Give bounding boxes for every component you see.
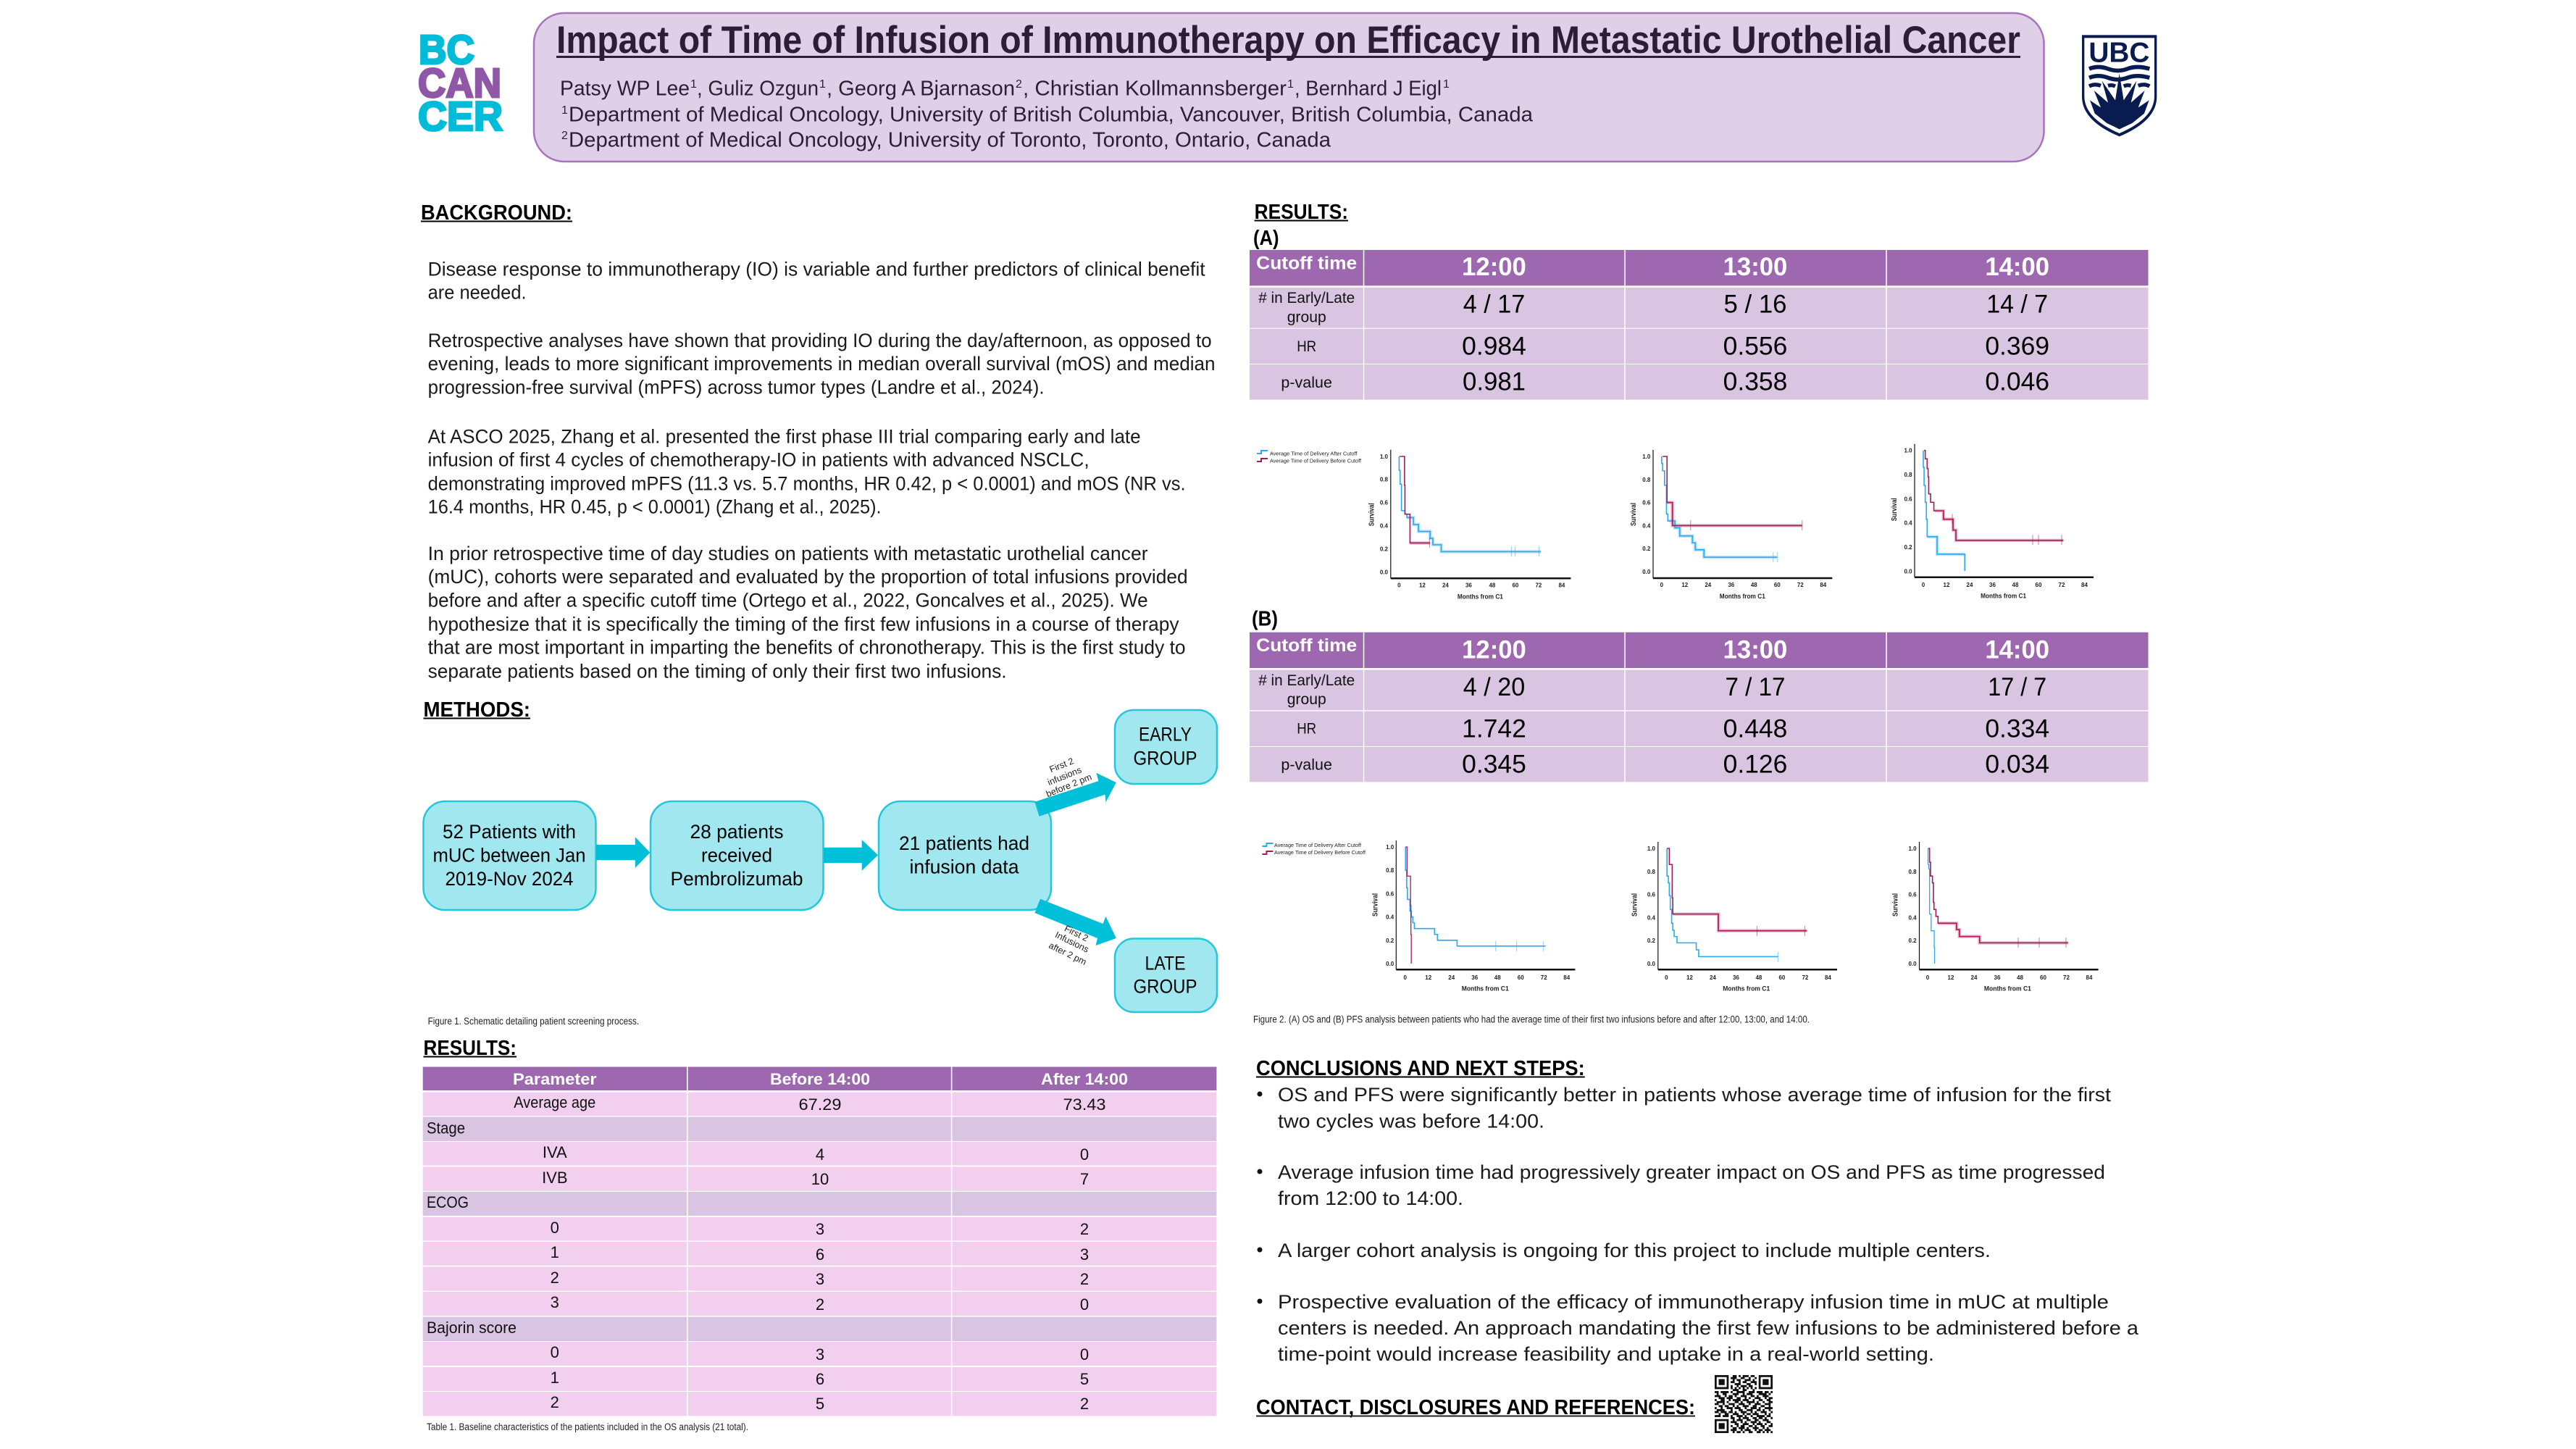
chart: OS cutoff 14:00: Months from C1 [1981,593,2026,600]
table B: progression-free survival cutoffs: 14:00 [1985,635,2049,664]
box: 28 patients [651,801,823,910]
chart: PFS cutoff 13:00: 0.8 [1647,869,1656,875]
background text block: separate patients based on the timing of only their first two infusions. [428,661,1007,682]
chart: OS cutoff 12:00: 24 [1442,582,1449,588]
background text block: evening, leads to more significant improvements in median overall survival (mOS) and median [428,353,1216,375]
table 1: baseline characteristics: 3 [816,1220,824,1238]
table B: progression-free survival cutoffs: group [1287,691,1326,708]
chart: PFS cutoff 12:00: 72 [1541,974,1547,981]
chart: PFS cutoff 13:00: Survival [1631,893,1639,916]
chart: OS cutoff 14:00: 1.0 [1904,448,1912,454]
chart: PFS cutoff 13:00: 0.2 [1647,938,1656,944]
chart: PFS cutoff 14:00: 48 [2017,974,2023,981]
table 1: baseline characteristics: 0 [551,1219,559,1237]
box: 28 patients: 28 patients [690,821,784,843]
heading: contact: CONTACT, DISCLOSURES AND REFERENCES: [1256,1396,1695,1419]
background text block: that are most important in imparting the benefits of chronotherapy. This is the first study to [428,637,1186,659]
bullet 4: time-point would increase feasibility and uptake in a real-world setting. [1278,1343,1934,1365]
chart: OS cutoff 13:00: Survival [1630,503,1638,526]
table A: overall survival cutoffs [1250,250,2149,400]
chart: OS cutoff 13:00: 60 [1774,582,1781,588]
chart: OS cutoff 14:00: 72 [2059,582,2065,588]
caption: table 1: Table 1. Baseline characteristics of the patients included in the OS analysis (21 total). [427,1421,748,1432]
chart: OS cutoff 14:00 [1891,444,2094,600]
affiliation 1: 1 [561,104,568,117]
background text block: Retrospective analyses have shown that providing IO during the day/afternoon, as opposed to [428,330,1212,351]
chart: PFS cutoff 12:00: 0.8 [1386,867,1394,874]
chart: OS cutoff 13:00: 0.4 [1642,522,1651,529]
chart: PFS cutoff 13:00: 1.0 [1647,845,1656,852]
chart: OS cutoff 12:00: 12 [1419,582,1426,588]
chart: PFS cutoff 12:00: 1.0 [1386,844,1394,851]
chart: PFS cutoff 13:00: 12 [1686,974,1693,981]
chart: PFS cutoff 13:00: 72 [1802,974,1809,981]
background text block [428,259,1216,682]
table B: progression-free survival cutoffs: 0.345 [1462,751,1526,779]
chart: PFS cutoff 13:00: 60 [1778,974,1786,981]
table A: overall survival cutoffs: 14 / 7 [1986,291,2048,319]
table 1: baseline characteristics: ECOG [427,1193,469,1211]
logo: UBC shield: UBC [2088,37,2149,69]
chart: OS cutoff 12:00: 0.6 [1380,500,1389,506]
table B: progression-free survival cutoffs: 7 / 17 [1726,673,1785,701]
table 1: baseline characteristics: 3 [816,1345,824,1364]
table 1: baseline characteristics: 7 [1080,1170,1089,1188]
table A: overall survival cutoffs: 5 / 16 [1724,291,1786,319]
table 1: baseline characteristics: 1 [551,1369,559,1387]
bullet 1: two cycles was before 14:00. [1278,1110,1544,1132]
chart: PFS cutoff 14:00: 60 [2040,974,2046,981]
box: 52 patients [423,801,595,910]
arrow label: after 2 pm: after 2 pm [1047,940,1088,967]
authors: 1 [1287,78,1294,91]
table B: progression-free survival cutoffs: 0.126 [1723,751,1787,779]
table 1: baseline characteristics: Parameter [513,1070,597,1088]
arrow label: before 2 pm [1045,756,1093,799]
table A: overall survival cutoffs: 13:00 [1723,253,1787,281]
table 1: baseline characteristics: 1 [551,1243,559,1261]
arrow: box 1 to box 2 [596,837,650,868]
bullet 1: OS and PFS were significantly better in patients whose average time of infusion for the first [1278,1084,2112,1106]
heading: conclusions: CONCLUSIONS AND NEXT STEPS: [1256,1057,1585,1080]
arrow: to early group [1034,773,1116,817]
table B: progression-free survival cutoffs: HR [1297,720,1316,737]
chart: OS cutoff 12:00: 0.0 [1380,569,1389,575]
box: late group: LATE [1145,953,1185,974]
arrow label: after 2 pm: Infusions [1053,930,1090,955]
legend: chart row B: Average Time of Delivery After Cutoff [1274,842,1362,848]
heading: background: BACKGROUND: [421,201,572,225]
background text block: In prior retrospective time of day studies on patients with metastatic urothelial cancer [428,543,1148,564]
chart: PFS cutoff 12:00: Months from C1 [1462,985,1509,992]
chart: OS cutoff 12:00: Months from C1 [1458,593,1503,600]
chart: PFS cutoff 14:00: 24 [1971,974,1978,981]
bullet 4 [1258,1291,2138,1365]
logo: BC Cancer: BC [419,27,474,73]
arrow label: after 2 pm [1047,923,1090,967]
table B: progression-free survival cutoffs: 4 / 20 [1463,673,1525,701]
box: 52 patients: 52 Patients with [443,821,576,843]
table B: progression-free survival cutoffs: p-value [1281,757,1332,774]
box: late group: GROUP [1133,976,1197,998]
table A: overall survival cutoffs: 12:00 [1462,253,1526,281]
background text block: infusion of first 4 cycles of chemotherapy-IO in patients with advanced NSCLC, [428,448,1090,470]
chart: OS cutoff 14:00: 36 [1989,582,1996,588]
chart: PFS cutoff 12:00: 12 [1425,974,1432,981]
table 1: baseline characteristics: 67.29 [798,1095,842,1114]
box: early group: GROUP [1133,748,1197,769]
table 1: baseline characteristics: 2 [1080,1220,1089,1238]
title: Impact of Time of Infusion of Immunotherapy on Efficacy in Metastatic Urothelial Cancer [556,19,2020,62]
chart: OS cutoff 14:00: Survival [1891,498,1899,521]
chart: OS cutoff 14:00: 48 [2012,582,2019,588]
authors: , Georg A Bjarnason [827,78,1015,101]
chart: OS cutoff 12:00: 36 [1465,582,1472,588]
legend: chart row B [1262,842,1366,856]
chart: PFS cutoff 14:00: 0.2 [1908,938,1917,944]
authors: 2 [1016,78,1022,91]
box: 28 patients: received [701,845,772,867]
table A: overall survival cutoffs: 0.369 [1985,332,2049,360]
table A: overall survival cutoffs: 0.984 [1462,332,1526,360]
legend: chart row A: Average Time of Delivery After Cutoff [1270,451,1358,456]
chart: PFS cutoff 13:00: 0.6 [1647,892,1656,898]
chart: PFS cutoff 14:00: Survival [1892,893,1900,916]
box: early group [1115,710,1217,784]
chart: OS cutoff 13:00: 0.8 [1642,477,1651,483]
chart: PFS cutoff 12:00: 0.6 [1386,890,1394,897]
chart: OS cutoff 13:00: 36 [1728,582,1735,588]
chart: OS cutoff 13:00 [1630,450,1832,600]
chart: OS cutoff 14:00: 60 [2036,582,2042,588]
chart: OS cutoff 14:00: 0.8 [1904,472,1912,478]
chart: OS cutoff 13:00: 0.2 [1642,546,1651,552]
chart: OS cutoff 12:00 [1368,450,1571,600]
bullet 2: Average infusion time had progressively greater impact on OS and PFS as time progressed [1278,1161,2105,1183]
authors: 1 [1443,78,1450,91]
chart: OS cutoff 13:00: 72 [1797,582,1804,588]
table 1: baseline characteristics: After 14:00 [1041,1070,1128,1088]
chart: PFS cutoff 12:00: 36 [1471,974,1479,981]
chart: OS cutoff 12:00: 60 [1512,582,1519,588]
table B: progression-free survival cutoffs: # in Early/Late [1258,672,1355,689]
legend: chart row B: Average Time of Delivery Before Cutoff [1274,849,1366,856]
chart: PFS cutoff 12:00 [1372,840,1575,992]
logo: BC Cancer [418,27,503,140]
chart: PFS cutoff 13:00: Months from C1 [1723,985,1770,992]
label: A: (A) [1253,227,1279,250]
bullet 2 [1258,1161,2105,1209]
chart: OS cutoff 14:00: 0 [1922,582,1925,588]
affiliation 2: 2 [561,130,568,142]
chart: OS cutoff 14:00: 0.0 [1904,568,1912,575]
logo: BC Cancer: CER [418,93,503,140]
table 1: baseline characteristics: 2 [551,1269,559,1287]
heading: methods: METHODS: [423,698,530,722]
table 1: baseline characteristics: 4 [816,1145,824,1164]
chart: PFS cutoff 13:00: 84 [1825,974,1831,981]
chart: OS cutoff 14:00: 84 [2081,582,2088,588]
table 1: baseline characteristics [423,1066,1216,1416]
chart: PFS cutoff 13:00: 0.0 [1647,961,1656,967]
chart: OS cutoff 12:00: 0.8 [1380,477,1389,483]
chart: OS cutoff 12:00: 72 [1535,582,1542,588]
background text block: Disease response to immunotherapy (IO) is variable and further predictors of clinical benefit [428,259,1205,280]
chart: OS cutoff 13:00: 0.0 [1642,569,1651,575]
conclusions list [1258,1084,2138,1365]
table B: progression-free survival cutoffs: 1.742 [1462,714,1526,743]
authors: 1 [819,78,826,91]
chart: PFS cutoff 14:00: 0.4 [1908,914,1917,921]
table 1: baseline characteristics: 0 [1080,1295,1089,1314]
chart: OS cutoff 13:00: 12 [1681,582,1689,588]
bullet 4: centers is needed. An approach mandating the first few infusions to be administered before a [1278,1317,2138,1339]
chart: PFS cutoff 13:00: 48 [1755,974,1762,981]
chart: PFS cutoff 14:00: 84 [2086,974,2093,981]
background text block: are needed. [428,282,527,304]
background text block: (mUC), cohorts were separated and evaluated by the proportion of total infusions provided [428,566,1188,588]
chart: PFS cutoff 14:00: 0.8 [1908,869,1917,875]
QR code [1715,1375,1773,1433]
chart: PFS cutoff 14:00: 1.0 [1908,845,1917,852]
chart: PFS cutoff 12:00: 24 [1448,974,1455,981]
table 1: baseline characteristics: Bajorin score [427,1319,517,1337]
legend: chart row A: Average Time of Delivery Before Cutoff [1270,458,1362,464]
chart: OS cutoff 13:00: Months from C1 [1720,593,1765,600]
affiliation 2: Department of Medical Oncology, University of Toronto, Toronto, Ontario, Canada [569,129,1331,152]
arrow label: before 2 pm: First 2 [1048,756,1075,774]
table B: progression-free survival cutoffs: 0.034 [1985,751,2049,779]
chart: PFS cutoff 14:00: Months from C1 [1984,985,2031,992]
chart: PFS cutoff 14:00: 72 [2063,974,2070,981]
chart: PFS cutoff 13:00 [1631,842,1837,992]
chart: PFS cutoff 14:00: 0 [1926,974,1930,981]
caption: figure 1: Figure 1. Schematic detailing patient screening process. [428,1016,639,1027]
chart: OS cutoff 13:00: 24 [1705,582,1712,588]
chart: PFS cutoff 14:00: 0.0 [1908,961,1917,967]
bullet 4: Prospective evaluation of the efficacy of immunotherapy infusion time in mUC at multiple [1278,1291,2109,1313]
table 1: baseline characteristics: 5 [816,1395,824,1413]
box: 52 patients: mUC between Jan [433,845,585,867]
box: 52 patients: 2019-Nov 2024 [445,868,574,890]
chart: OS cutoff 14:00: 0.2 [1904,544,1912,551]
chart: OS cutoff 12:00: 0 [1397,582,1401,588]
table 1: baseline characteristics: 0 [1080,1345,1089,1364]
chart: OS cutoff 13:00: 48 [1751,582,1757,588]
flowchart [423,710,1217,1012]
chart: OS cutoff 13:00: 84 [1820,582,1827,588]
chart: PFS cutoff 14:00: 0.6 [1908,892,1917,898]
box: 21 patients: 21 patients had [899,832,1029,854]
chart: OS cutoff 12:00: 84 [1558,582,1565,588]
chart: OS cutoff 12:00: 0.4 [1380,522,1389,529]
table B: progression-free survival cutoffs: 13:00 [1723,635,1787,664]
box: late group [1115,939,1217,1012]
table A: overall survival cutoffs: 14:00 [1985,253,2049,281]
table 1: baseline characteristics: IVB [542,1169,568,1187]
chart: OS cutoff 14:00: 0.6 [1904,496,1912,502]
chart: PFS cutoff 12:00: 0 [1403,974,1407,981]
bullet 3: A larger cohort analysis is ongoing for this project to include multiple centers. [1278,1240,1991,1261]
chart: PFS cutoff 12:00: 0.0 [1386,961,1394,967]
bullet 1 [1258,1084,2112,1132]
authors: 1 [690,78,697,91]
arrow label: after 2 pm: First 2 [1063,923,1090,943]
arrow: to late group [1034,899,1116,945]
background text block: hypothesize that it is specifically the timing of the first few infusions in a course of therapy [428,613,1179,635]
table A: overall survival cutoffs: # in Early/Late [1258,290,1355,306]
chart: PFS cutoff 12:00: 60 [1518,974,1524,981]
table B: progression-free survival cutoffs: 12:00 [1462,635,1526,664]
label: B: (B) [1252,607,1278,630]
table 1: baseline characteristics: 2 [816,1295,824,1314]
table 1: baseline characteristics: Average age [514,1093,595,1111]
chart: OS cutoff 14:00: 24 [1967,582,1973,588]
authors: Patsy WP Lee [560,78,690,101]
chart: PFS cutoff 12:00: 48 [1494,974,1501,981]
table A: overall survival cutoffs: Cutoff time [1256,253,1357,273]
arrow label: before 2 pm: before 2 pm [1045,772,1093,799]
chart: OS cutoff 12:00: 1.0 [1380,454,1389,460]
box: 28 patients: Pembrolizumab [671,868,803,890]
table 1: baseline characteristics: 10 [811,1170,829,1188]
chart: OS cutoff 14:00: 12 [1944,582,1950,588]
table 1: baseline characteristics: 3 [1080,1245,1089,1264]
chart: OS cutoff 12:00: Survival [1368,503,1376,526]
background text block: before and after a specific cutoff time (Ortego et al., 2022, Goncalves et al., 2025). We [428,589,1148,611]
table A: overall survival cutoffs: 0.358 [1723,367,1787,396]
arrow: box 2 to box 3 [824,840,878,871]
background text block: demonstrating improved mPFS (11.3 vs. 5.7 months, HR 0.42, p < 0.0001) and mOS (NR vs. [428,472,1186,494]
table 1: baseline characteristics: 73.43 [1063,1095,1105,1114]
affiliation 1: Department of Medical Oncology, University of British Columbia, Vancouver, British Columbia, Canada [569,104,1533,127]
chart: OS cutoff 12:00: 0.2 [1380,546,1389,552]
chart: OS cutoff 14:00: 0.4 [1904,520,1912,527]
table 1: baseline characteristics: 6 [816,1370,824,1388]
chart: PFS cutoff 13:00: 36 [1733,974,1739,981]
chart: PFS cutoff 12:00: 0.2 [1386,938,1394,944]
authors [560,78,1450,101]
table 1: baseline characteristics: 2 [551,1393,559,1411]
box: early group: EARLY [1139,724,1192,746]
background text block: 16.4 months, HR 0.45, p < 0.0001) (Zhang et al., 2025). [428,496,882,517]
heading: results right: RESULTS: [1255,201,1348,224]
logo: BC Cancer: CAN [418,60,501,107]
background text block: At ASCO 2025, Zhang et al. presented the first phase III trial comparing early and late [428,425,1141,447]
legend: chart row A [1257,451,1362,464]
chart: PFS cutoff 12:00: 84 [1563,974,1571,981]
table A: overall survival cutoffs: 0.046 [1985,367,2049,396]
logo: UBC shield [2082,35,2157,136]
table 1: baseline characteristics: 6 [816,1245,824,1264]
table B: progression-free survival cutoffs: 0.448 [1723,714,1787,743]
table B: progression-free survival cutoffs: Cutoff time [1256,635,1357,656]
table B: progression-free survival cutoffs: 0.334 [1985,714,2049,743]
table A: overall survival cutoffs: 0.981 [1463,367,1526,396]
bullet 2: from 12:00 to 14:00. [1278,1187,1463,1209]
box: 21 patients [879,801,1051,910]
chart: PFS cutoff 14:00: 12 [1948,974,1954,981]
box: 21 patients: infusion data [910,856,1019,878]
header panel [534,13,2044,162]
table A: overall survival cutoffs: p-value [1281,375,1332,391]
chart: OS cutoff 13:00: 0 [1660,582,1664,588]
arrow label: before 2 pm: infusions [1046,765,1083,788]
table B: progression-free survival cutoffs: 17 / 7 [1988,673,2046,701]
table 1: baseline characteristics: 2 [1080,1270,1089,1288]
table 1: baseline characteristics: 0 [551,1343,559,1361]
table 1: baseline characteristics: 3 [816,1270,824,1288]
chart: PFS cutoff 12:00: Survival [1372,893,1380,916]
authors: , Christian Kollmannsberger [1023,78,1287,101]
table 1: baseline characteristics: 0 [1080,1145,1089,1164]
chart: PFS cutoff 13:00: 24 [1710,974,1716,981]
chart: PFS cutoff 13:00: 0 [1665,974,1668,981]
chart: PFS cutoff 14:00: 36 [1994,974,2001,981]
chart: OS cutoff 12:00: 48 [1489,582,1496,588]
table 1: baseline characteristics: 2 [1080,1395,1089,1413]
table A: overall survival cutoffs: group [1287,309,1326,325]
table 1: baseline characteristics: IVA [543,1143,567,1161]
chart: PFS cutoff 12:00: 0.4 [1386,914,1394,921]
chart: OS cutoff 13:00: 0.6 [1642,500,1651,506]
authors: , Guliz Ozgun [697,78,819,101]
authors: , Bernhard J Eigl [1295,78,1442,101]
table 1: baseline characteristics: Before 14:00 [770,1070,870,1088]
table 1: baseline characteristics: 5 [1080,1370,1089,1388]
table A: overall survival cutoffs: 0.556 [1723,332,1787,360]
caption: figure 2: Figure 2. (A) OS and (B) PFS analysis between patients who had the average time of their first two infusions before and after 12:00, 13:00, and 14:00. [1253,1014,1810,1025]
table A: overall survival cutoffs: 4 / 17 [1463,291,1525,319]
chart: PFS cutoff 13:00: 0.4 [1647,914,1656,921]
heading: results left: RESULTS: [423,1037,517,1060]
table A: overall survival cutoffs: HR [1297,338,1316,355]
chart: OS cutoff 13:00: 1.0 [1642,454,1651,460]
background text block: progression-free survival (mPFS) across tumor types (Landre et al., 2024). [428,377,1045,398]
table 1: baseline characteristics: Stage [427,1119,465,1137]
table 1: baseline characteristics: 3 [551,1293,559,1311]
chart: PFS cutoff 14:00 [1892,842,2099,992]
table B: progression-free survival cutoffs [1250,632,2149,782]
